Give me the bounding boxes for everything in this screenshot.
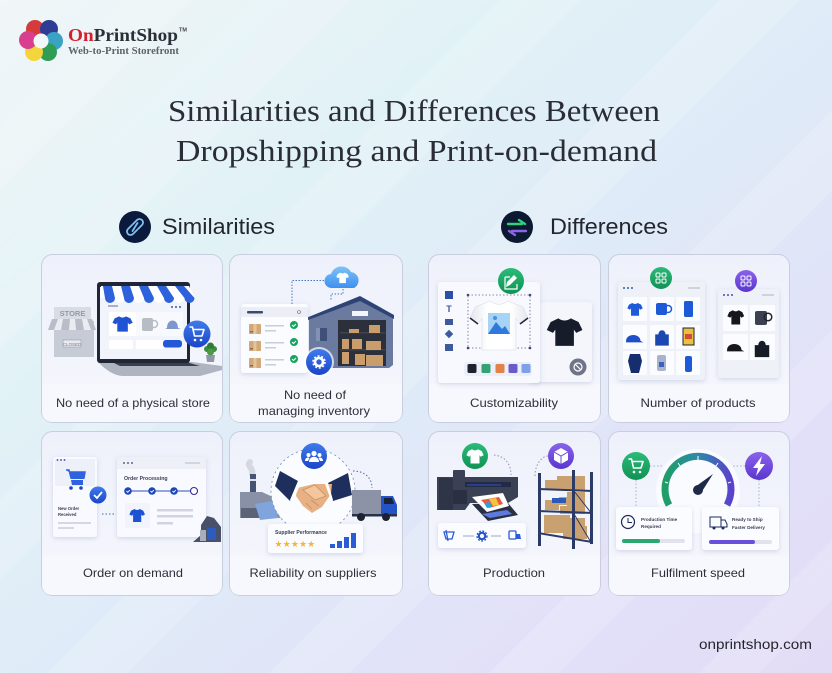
illustration: storage shelf with boxes xyxy=(538,470,593,549)
icon: green grid badge xyxy=(650,267,672,289)
icon: cart badge xyxy=(184,320,210,348)
illustration: small closed shop xyxy=(193,516,221,542)
illustration: delivery truck xyxy=(352,490,397,521)
panel: production xyxy=(428,432,600,596)
panel: no need of a physical store xyxy=(42,254,222,422)
production time card xyxy=(616,507,692,550)
icon: chain link xyxy=(119,211,151,243)
gauge needle xyxy=(695,474,713,493)
icon: lightning badge xyxy=(745,452,773,480)
icon: edit badge xyxy=(498,268,524,294)
heading: Differences: Differences xyxy=(550,214,668,239)
caption xyxy=(258,388,370,418)
caption: No need of a physical store xyxy=(56,396,210,410)
caption: No need of xyxy=(284,388,347,402)
ready to ship card: Ready to Ship xyxy=(732,517,763,522)
icon: colourful flower logo xyxy=(19,20,63,61)
heading: Similarities xyxy=(119,211,275,243)
customisation editor panel xyxy=(438,282,540,383)
inventory list panel xyxy=(241,304,308,373)
speedometer gauge xyxy=(656,449,740,533)
large catalogue panel xyxy=(618,282,705,380)
rating stars: ★★★★★ xyxy=(274,539,315,549)
logo: OnPrintShop xyxy=(19,20,187,61)
new order card xyxy=(53,457,97,537)
icon: blocked badge xyxy=(570,358,586,376)
caption: Number of products xyxy=(640,396,756,410)
tool icons: T xyxy=(446,304,452,314)
icon: cart xyxy=(66,470,85,490)
illustration: warehouse xyxy=(306,296,394,368)
caption: Reliability on suppliers xyxy=(250,566,376,580)
small catalogue panel xyxy=(718,289,779,378)
bar chart xyxy=(330,533,356,548)
caption: Fulfilment speed xyxy=(651,566,745,580)
icon: plant xyxy=(204,342,217,362)
supplier performance card xyxy=(268,524,363,553)
icon: people badge xyxy=(301,443,327,469)
illustration: grey store xyxy=(48,307,96,357)
production time card: Required xyxy=(641,524,661,529)
caption: Production xyxy=(483,566,545,580)
icon: swap arrows xyxy=(501,211,533,243)
caption: Order on demand xyxy=(83,566,183,580)
icon: box badge xyxy=(548,443,574,469)
process flow card xyxy=(438,523,526,548)
panel: customizability xyxy=(428,254,600,422)
title xyxy=(168,93,661,168)
icon: gear badge xyxy=(304,347,334,377)
product tiles xyxy=(109,312,183,349)
panel: order on demand xyxy=(42,432,222,596)
order processing card: Order Processing xyxy=(124,476,168,482)
trademark: TM xyxy=(179,28,187,34)
icon: cart badge xyxy=(622,452,650,480)
illustration: laptop with online store xyxy=(97,282,222,376)
production time card: Production Time xyxy=(641,517,678,522)
supplier performance card: Supplier Performance xyxy=(275,530,327,536)
new order card: New Order xyxy=(58,506,80,511)
caption: Customizability xyxy=(470,396,558,410)
illustration: grey store: STORE xyxy=(60,309,85,318)
back panel with black t-shirt xyxy=(530,302,592,382)
panel: no need of managing inventory xyxy=(230,254,402,422)
illustration: grey store: CLOSED xyxy=(63,342,82,347)
website url: onprintshop.com xyxy=(699,637,812,652)
panel: fulfilment speed xyxy=(608,432,790,596)
illustration: factory xyxy=(240,462,290,520)
heading: Similarities: Similarities xyxy=(162,214,275,239)
icon: t-shirt badge xyxy=(462,443,488,469)
panel: reliability on suppliers xyxy=(230,432,402,596)
title: Similarities and Differences Between xyxy=(168,93,661,128)
artwork placeholder on shirt xyxy=(488,313,510,334)
colour swatches xyxy=(464,362,532,376)
icon: cloud with t-shirt xyxy=(324,266,359,288)
logo tagline: Web-to-Print Storefront xyxy=(68,46,180,57)
panel: number of products xyxy=(608,254,790,422)
ready to ship card xyxy=(702,507,779,550)
circle behind handshake xyxy=(271,449,355,533)
icon: purple grid badge xyxy=(735,270,757,292)
title: Dropshipping and Print-on-demand xyxy=(176,133,658,168)
icon: handshake xyxy=(275,471,352,513)
caption: managing inventory xyxy=(258,404,370,418)
new order card: Received xyxy=(58,512,77,517)
order processing card xyxy=(117,457,206,537)
awning xyxy=(100,286,195,303)
icon: check badge xyxy=(90,486,106,504)
ready to ship card: Faster Delivery xyxy=(732,525,765,530)
illustration: printer xyxy=(437,470,518,521)
logo wordmark: OnPrintShop xyxy=(68,25,178,45)
heading: Differences xyxy=(501,211,668,243)
